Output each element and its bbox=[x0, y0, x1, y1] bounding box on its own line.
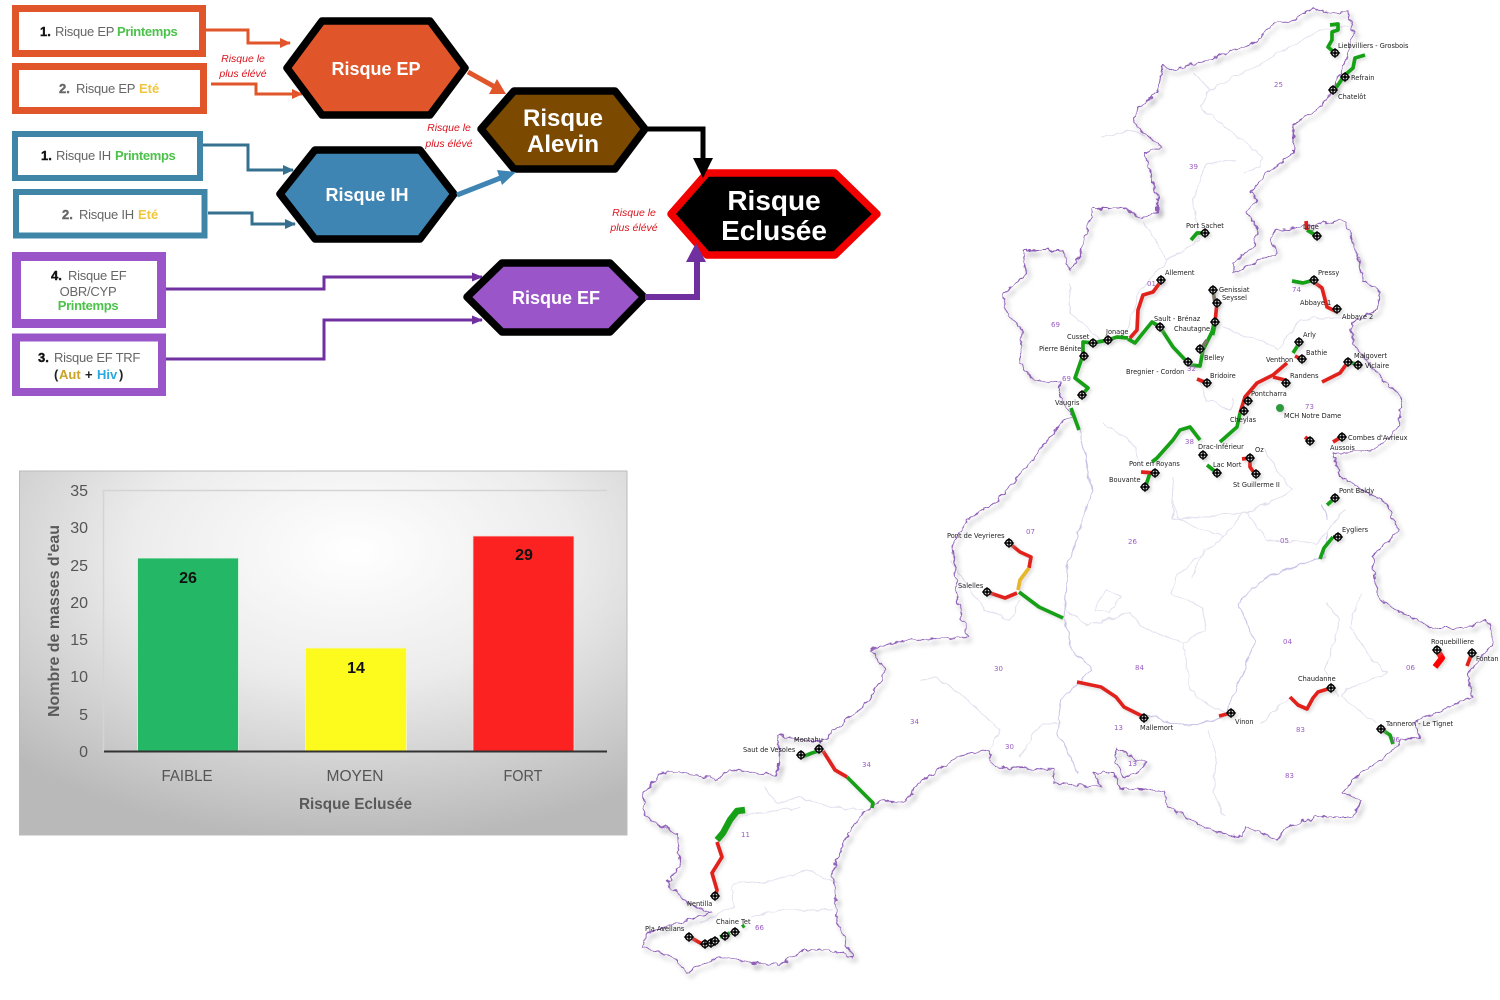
map: station names: Pont de Veyrieres bbox=[947, 532, 1005, 540]
map: station names: Bouvante bbox=[1109, 476, 1141, 484]
annotation: Risque le plus élévé (EP): plus élévé bbox=[218, 68, 267, 80]
hexagon: Risque Alevin bbox=[481, 91, 645, 169]
map: station names: Vinon bbox=[1235, 718, 1254, 726]
annotation: Risque le plus élévé (Eclusée): Risque le bbox=[612, 207, 656, 219]
category labels bbox=[162, 768, 543, 785]
connector: IH Eté to Risque IH bbox=[208, 213, 295, 224]
box: 2. Risque IH Eté bbox=[16, 192, 204, 236]
map: station names: Drac-Inférieur bbox=[1198, 443, 1244, 451]
box: 2. Risque IH Eté: 2. bbox=[62, 207, 73, 222]
arrow: Risque EF to Risque Eclusée bbox=[645, 243, 706, 297]
map: station names: Chaine Tet bbox=[716, 918, 751, 926]
map: station names: Pont Baldy bbox=[1339, 487, 1374, 495]
box: 4. Risque EF OBR/CYP Printemps: Printemps bbox=[58, 298, 118, 313]
box: 3. Risque EF TRF (Aut + Hiv): + bbox=[85, 367, 93, 382]
arrow: Risque EP to Risque Alevin bbox=[468, 72, 506, 94]
map: station names: Pontcharra bbox=[1251, 390, 1287, 398]
map: station names: Belley bbox=[1204, 354, 1224, 362]
box: 1. Risque EP Printemps bbox=[16, 8, 202, 54]
box: 1. Risque IH Printemps bbox=[15, 134, 200, 178]
map: department numbers: 11 bbox=[741, 831, 750, 839]
category labels: FORT bbox=[504, 768, 543, 785]
map: station names: Port Sachet bbox=[1186, 222, 1224, 230]
box: 1. Risque IH Printemps: Risque IH bbox=[56, 148, 111, 163]
box: 2. Risque IH Eté: Risque IH bbox=[79, 207, 134, 222]
y axis title: Nombre de masses d'eau bbox=[46, 525, 63, 717]
map: station names: Genissiat bbox=[1219, 286, 1250, 294]
map: department numbers: 07 bbox=[1026, 528, 1035, 536]
arrow: Risque IH to Risque Alevin bbox=[457, 170, 516, 195]
y axis ticks: 15 bbox=[70, 632, 88, 649]
box: 4. Risque EF OBR/CYP Printemps: Risque EF bbox=[68, 268, 127, 283]
map: station names: Cusset bbox=[1067, 333, 1090, 341]
hexagon: Risque EF bbox=[467, 263, 644, 332]
box: 1. Risque EP Printemps: Printemps bbox=[117, 24, 178, 39]
map: regional border bbox=[643, 8, 1494, 973]
map: station names: Pierre Bénite bbox=[1039, 345, 1081, 353]
box: 1. Risque IH Printemps: 1. bbox=[41, 148, 52, 163]
map: department numbers: 34 bbox=[862, 761, 871, 769]
map: department numbers: 83 bbox=[1296, 726, 1305, 734]
hexagon: Risque EP bbox=[287, 21, 465, 115]
map: station names: Cheylas bbox=[1230, 416, 1257, 424]
map: station names: Liebvilliers - Grosbois bbox=[1338, 42, 1409, 50]
category labels: FAIBLE bbox=[162, 768, 212, 785]
map: department numbers: 05 bbox=[1280, 537, 1289, 545]
map: station names: Vaugris bbox=[1055, 399, 1080, 407]
bar chart: number of water bodies by risk bbox=[20, 471, 627, 835]
map: department numbers: 25 bbox=[1274, 81, 1283, 89]
map: station names: Viclaire bbox=[1365, 362, 1389, 370]
box: 3. Risque EF TRF (Aut + Hiv): Risque EF TRF bbox=[54, 350, 140, 365]
annotation: Risque le plus élévé (Alevin): Risque le bbox=[427, 122, 471, 134]
map: station names: Chautagne bbox=[1174, 325, 1210, 333]
map: station names: Abbaye 1 bbox=[1300, 299, 1331, 307]
hexagon: Risque Alevin: Risque bbox=[523, 105, 603, 132]
map: department numbers: 74 bbox=[1292, 286, 1301, 294]
box: 2. Risque EP Eté: Risque EP bbox=[76, 81, 135, 96]
map: station names: Jonage bbox=[1105, 328, 1128, 336]
annotation: Risque le plus élévé (EP): Risque le bbox=[221, 53, 265, 65]
box: 2. Risque EP Eté bbox=[16, 66, 204, 110]
box: 2. Risque EP Eté: Eté bbox=[139, 81, 159, 96]
map: station names: Eygliers bbox=[1342, 526, 1369, 534]
map: station names: Chaudanne bbox=[1298, 675, 1336, 683]
box: 1. Risque EP Printemps: Risque EP bbox=[55, 24, 114, 39]
connector: EF OBR/CYP to Risque EF bbox=[166, 277, 482, 289]
box: 3. Risque EF TRF (Aut + Hiv): ) bbox=[119, 367, 123, 382]
map: station names: Refrain bbox=[1351, 74, 1374, 82]
map: station names: Malgovert bbox=[1354, 352, 1387, 360]
map: department numbers: 39 bbox=[1189, 163, 1198, 171]
box: 2. Risque EP Eté: 2. bbox=[59, 81, 70, 96]
box: 1. Risque EP Printemps: 1. bbox=[40, 24, 51, 39]
bar: FORT 29: 29 bbox=[515, 547, 533, 564]
box: 3. Risque EF TRF (Aut + Hiv): 3. bbox=[38, 350, 49, 365]
box: 3. Risque EF TRF (Aut + Hiv): ( bbox=[54, 367, 59, 382]
map: department numbers: 83 bbox=[1285, 772, 1294, 780]
box: 4. Risque EF OBR/CYP Printemps: 4. bbox=[51, 268, 62, 283]
box: 2. Risque IH Eté: Eté bbox=[138, 207, 158, 222]
map: department numbers: 69 bbox=[1051, 321, 1060, 329]
bar: FAIBLE 26: 26 bbox=[179, 570, 197, 587]
map: department numbers: 30 bbox=[1005, 743, 1014, 751]
chart background panel bbox=[20, 471, 627, 835]
map of river basin with hydropower reaches bbox=[643, 8, 1499, 973]
map: station names: MCH Notre Dame bbox=[1284, 412, 1341, 420]
map: department numbers bbox=[741, 81, 1415, 932]
flowchart: risk aggregation bbox=[15, 8, 877, 392]
hexagon: Risque Alevin: Alevin bbox=[527, 131, 599, 158]
y axis ticks: 5 bbox=[79, 707, 88, 724]
category labels: MOYEN bbox=[326, 768, 384, 785]
map: station names: Bathie bbox=[1306, 349, 1327, 357]
map: station names: Loge bbox=[1303, 223, 1319, 231]
map: station names: Sault - Brénaz bbox=[1154, 315, 1201, 323]
box: 3. Risque EF TRF (Aut + Hiv) bbox=[16, 338, 162, 392]
map: department numbers: 32 bbox=[1187, 365, 1196, 373]
map: station names: St Guillerme II bbox=[1233, 481, 1280, 489]
map: station names: Tanneron - Le Tignet bbox=[1385, 720, 1454, 728]
map: department numbers: 13 bbox=[1128, 760, 1137, 768]
map: station markers bbox=[684, 48, 1477, 949]
map: station names: Oz bbox=[1255, 446, 1264, 454]
y axis ticks: 30 bbox=[70, 520, 88, 537]
map: station names: Pressy bbox=[1318, 269, 1339, 277]
box: 4. Risque EF OBR/CYP Printemps bbox=[16, 256, 162, 324]
connector: EP Printemps to Risque EP bbox=[206, 30, 290, 43]
map: station names: Randens bbox=[1290, 372, 1319, 380]
map: department numbers: 34 bbox=[910, 718, 919, 726]
hexagon: Risque EP: Risque EP bbox=[331, 59, 421, 79]
annotation: Risque le plus élévé (Alevin): plus élévé bbox=[424, 138, 473, 150]
map: department numbers: 06 bbox=[1391, 736, 1400, 744]
map: station names: Chatelôt bbox=[1338, 93, 1366, 101]
connector: EP Eté to Risque EP bbox=[211, 84, 302, 94]
bar: MOYEN 14: 14 bbox=[347, 660, 365, 677]
map: station names: Nentilla bbox=[687, 900, 712, 908]
box: 1. Risque IH Printemps: Printemps bbox=[115, 148, 176, 163]
hexagon: Risque Eclusée bbox=[671, 173, 877, 255]
map: department numbers: 66 bbox=[755, 924, 764, 932]
plot frame bbox=[104, 490, 607, 751]
box: 3. Risque EF TRF (Aut + Hiv): Aut bbox=[59, 367, 81, 382]
map: department numbers: 13 bbox=[1114, 724, 1123, 732]
hexagon: Risque Eclusée: Risque bbox=[727, 185, 821, 216]
bar: FAIBLE 26 bbox=[138, 558, 238, 752]
map: station names: Seyssel bbox=[1222, 294, 1247, 302]
map: department numbers: 01 bbox=[1147, 280, 1156, 288]
map: station names: Allement bbox=[1165, 269, 1195, 277]
map: station names: Pla Avellans bbox=[645, 925, 685, 933]
map: station names: Fontan bbox=[1476, 655, 1499, 663]
map: station names: Venthon bbox=[1266, 356, 1293, 364]
hexagon: Risque EF: Risque EF bbox=[512, 288, 600, 308]
connector: EF TRF to Risque EF bbox=[166, 320, 482, 359]
map: department numbers: 30 bbox=[994, 665, 1003, 673]
map: station names bbox=[645, 42, 1499, 933]
x axis line bbox=[104, 750, 607, 752]
arrow: Risque Alevin to Risque Eclusée bbox=[646, 129, 713, 178]
map: station names: Abbaye 2 bbox=[1342, 313, 1373, 321]
map: station names: Salelles bbox=[958, 582, 984, 590]
map: department numbers: 38 bbox=[1185, 438, 1194, 446]
x axis title: Risque Eclusée bbox=[299, 796, 412, 813]
box: 3. Risque EF TRF (Aut + Hiv): Hiv bbox=[97, 367, 118, 382]
bar: FORT 29 bbox=[473, 536, 574, 752]
y axis ticks: 25 bbox=[70, 558, 88, 575]
box: 4. Risque EF OBR/CYP Printemps: OBR/CYP bbox=[60, 284, 116, 299]
map: station names: Roquebilliere bbox=[1431, 638, 1474, 646]
y axis ticks: 10 bbox=[70, 669, 88, 686]
map: station names: Bridoire bbox=[1210, 372, 1236, 380]
connector: IH Printemps to Risque IH bbox=[203, 145, 293, 170]
map: station names: Aussois bbox=[1330, 444, 1355, 452]
map: station names: Lac Mort bbox=[1213, 461, 1242, 469]
bar: MOYEN 14 bbox=[306, 648, 406, 752]
map: river reaches coloured by risk bbox=[688, 24, 1472, 944]
map: department boundaries and rivers bbox=[700, 27, 1387, 923]
map: station names: Arly bbox=[1303, 331, 1316, 339]
map: department numbers: 73 bbox=[1305, 403, 1314, 411]
map: station names: Mallemort bbox=[1140, 724, 1174, 732]
hexagon: Risque IH bbox=[280, 150, 454, 239]
y axis ticks: 35 bbox=[70, 483, 88, 500]
map: station names: Combes d'Avrieux bbox=[1348, 434, 1408, 442]
y axis ticks: 0 bbox=[79, 744, 88, 761]
hexagon: Risque Eclusée: Eclusée bbox=[721, 215, 827, 246]
map: station names: Montahu bbox=[794, 736, 823, 744]
y axis ticks bbox=[70, 483, 88, 761]
map: department numbers: 26 bbox=[1128, 538, 1137, 546]
map: station names: Pont en Royans bbox=[1129, 460, 1180, 468]
map: department numbers: 06 bbox=[1406, 664, 1415, 672]
map: station names: Saut de Vesoles bbox=[743, 746, 796, 754]
map: department numbers: 84 bbox=[1135, 664, 1144, 672]
map: station names: Bregnier - Cordon bbox=[1126, 368, 1184, 376]
y axis ticks: 20 bbox=[70, 595, 88, 612]
map: department numbers: 69 bbox=[1062, 375, 1071, 383]
map: department numbers: 04 bbox=[1283, 638, 1292, 646]
annotation: Risque le plus élévé (Eclusée): plus élévé bbox=[609, 222, 658, 234]
hexagon: Risque IH: Risque IH bbox=[325, 185, 409, 205]
